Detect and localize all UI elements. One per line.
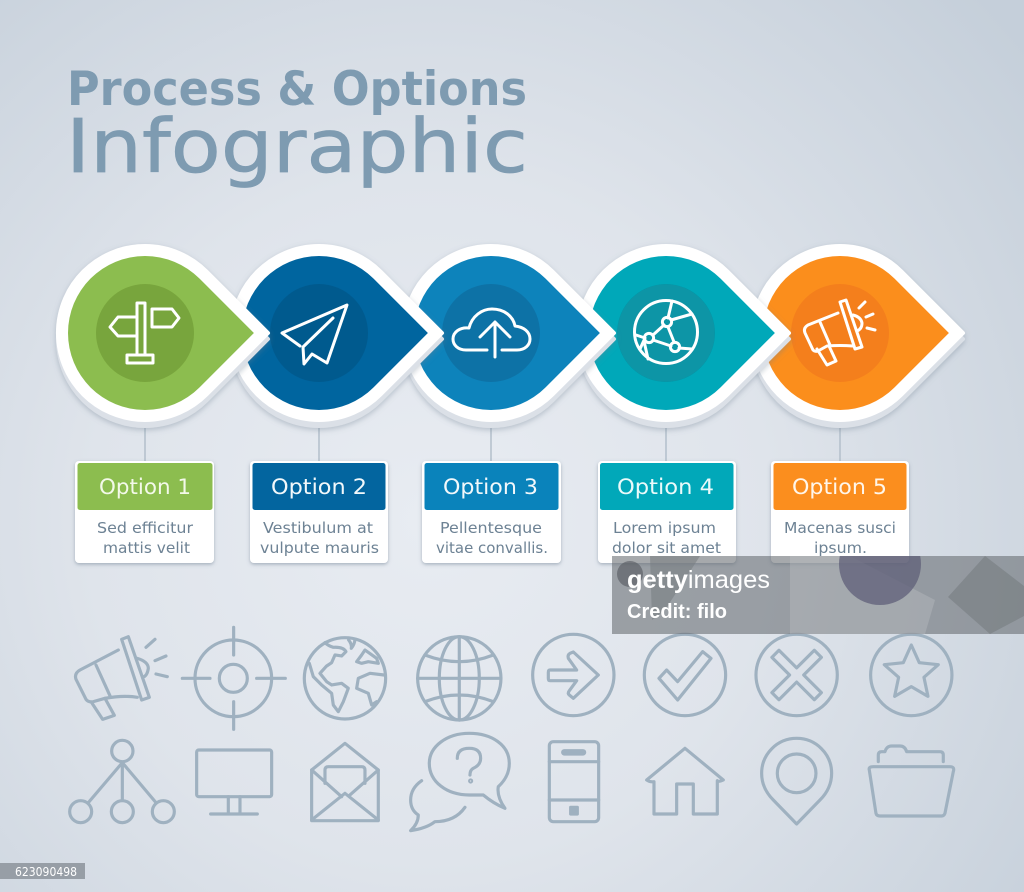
connector lines	[145, 425, 840, 462]
image id tag: 623090498	[15, 865, 77, 879]
pin 5: orange megaphone	[753, 246, 963, 426]
card: option 5: Option 5	[792, 475, 887, 499]
icon: location pin	[762, 738, 832, 824]
icon: star circle	[871, 634, 952, 716]
pin 4: teal network globe	[579, 246, 789, 426]
icon: arrow circle	[533, 634, 614, 716]
icon: check circle	[644, 634, 726, 716]
icon: hierarchy	[70, 740, 174, 823]
title line: Process & Options: Process & Options	[67, 62, 527, 117]
card: option 3	[422, 461, 561, 563]
title line: Infographic: Infographic	[66, 104, 528, 190]
card: option 2: Vestibulum at	[263, 519, 373, 537]
card: option 4: Lorem ipsum	[613, 519, 716, 537]
icon: signpost	[110, 303, 179, 363]
icon set: right half	[533, 633, 954, 824]
icon: question speech bubbles	[411, 733, 509, 831]
pin 1: green signpost	[58, 246, 268, 426]
icon: wireframe globe	[418, 637, 501, 720]
card: option 5: Macenas susci	[784, 519, 896, 537]
icon: smartphone	[549, 742, 599, 822]
icon: monitor	[197, 750, 272, 814]
card: option 2: Option 2	[271, 475, 367, 499]
card: option 1	[75, 461, 214, 563]
icon: megaphone outline	[75, 637, 167, 719]
icon: folder	[869, 746, 954, 816]
card: option 1: Sed efficitur	[97, 519, 194, 537]
card: option 5	[771, 461, 909, 563]
icon: house	[647, 748, 723, 814]
watermark credit: Credit: filo	[627, 601, 727, 623]
icon: cross circle	[754, 633, 839, 717]
icon: target	[182, 627, 285, 729]
card: option 3: Pellentesque	[440, 519, 542, 537]
card: option 4: Option 4	[617, 475, 714, 499]
pin 3: blue cloud upload	[404, 246, 614, 426]
title	[66, 62, 528, 190]
process pins	[58, 246, 963, 426]
card: option 1: Option 1	[99, 475, 191, 499]
icon: earth	[304, 638, 386, 719]
watermark banner	[612, 556, 1024, 634]
card: option 2	[250, 461, 388, 563]
icon: open envelope	[312, 743, 378, 821]
icon: megaphone	[804, 300, 875, 365]
watermark logo: gettyimages	[627, 566, 770, 594]
card: option 4: dolor sit amet	[612, 539, 721, 557]
pin 2: dark blue paper plane	[232, 246, 442, 426]
icon: cloud upload	[453, 309, 530, 357]
card: option 3: Option 3	[443, 475, 538, 499]
icon: network globe	[634, 300, 698, 364]
card: option 4	[598, 461, 736, 563]
card: option 2: vulpute mauris	[260, 539, 379, 557]
card: option 3: vitae convallis.	[436, 539, 548, 557]
icon set: left half	[70, 627, 509, 831]
option cards	[75, 461, 909, 563]
icon: paper plane	[282, 305, 347, 364]
card: option 1: mattis velit	[103, 539, 190, 557]
card: option 5: ipsum.	[814, 539, 867, 557]
